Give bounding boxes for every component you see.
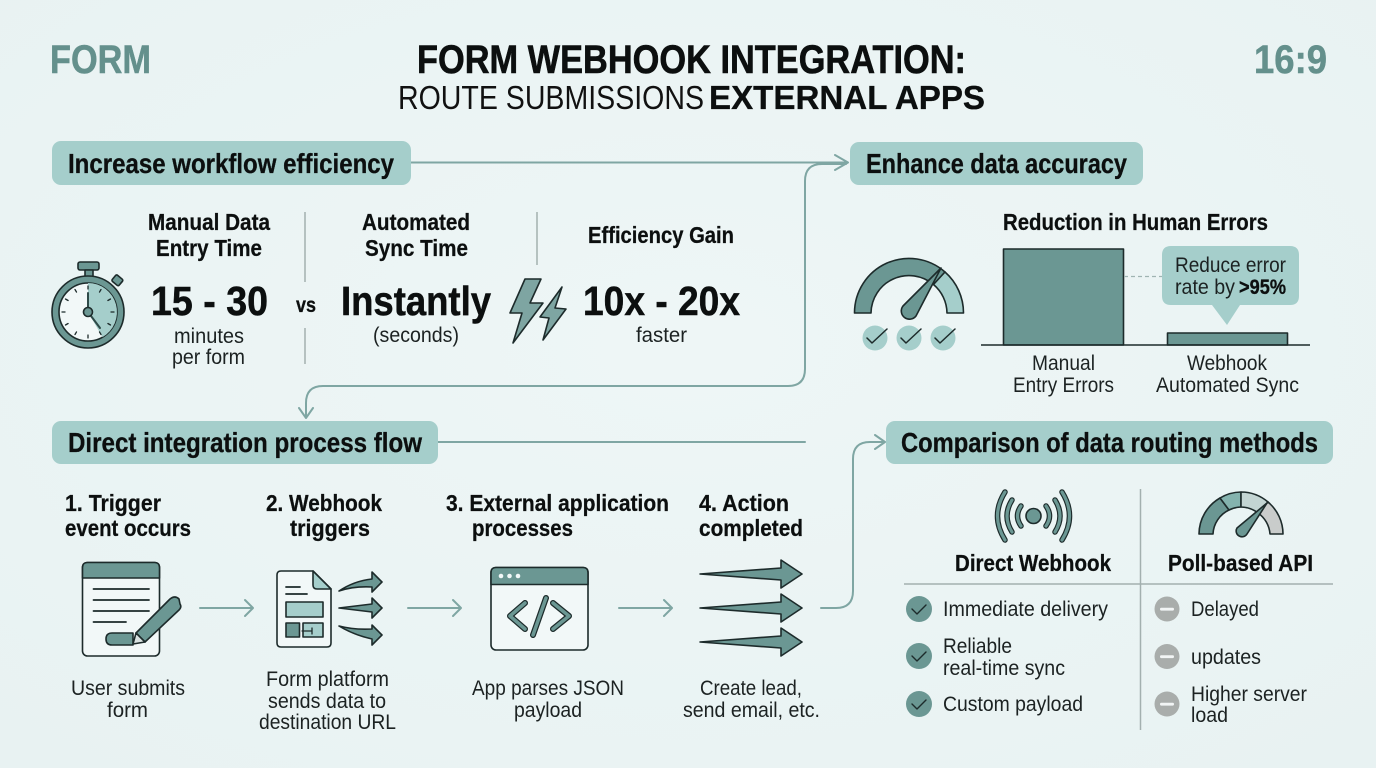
step 3: external application processes: 3. External application xyxy=(446,490,669,516)
title: EXTERNAL APPS xyxy=(709,79,985,116)
stat: manual data entry time: Manual Data xyxy=(148,209,271,235)
stat: efficiency gain: Efficiency Gain xyxy=(588,222,734,248)
title: ROUTE SUBMISSIONS xyxy=(398,79,704,116)
divider label: vs: vs xyxy=(296,294,316,317)
step 3: external application processes: processes xyxy=(472,515,573,541)
row: custom payload: Custom payload xyxy=(943,693,1083,716)
icon: three action arrows xyxy=(700,560,802,656)
heading pill: Comparison of data routing methods xyxy=(886,421,1333,464)
column: direct webhook xyxy=(906,492,1112,717)
icon: broadcast signal xyxy=(998,492,1070,540)
row: updates: updates xyxy=(1191,646,1261,669)
row: delayed xyxy=(1154,596,1259,622)
icon: form and pencil xyxy=(82,562,181,656)
icon: stopwatch xyxy=(52,262,124,348)
heading pill: Increase workflow efficiency: Increase workflow efficiency xyxy=(68,148,395,179)
heading pill: Enhance data accuracy xyxy=(850,142,1143,185)
step 2: webhook triggers: sends data to xyxy=(268,690,386,713)
heading pill: Comparison of data routing methods: Comparison of data routing methods xyxy=(901,427,1318,458)
chart: reduction in human errors: Manual xyxy=(1032,352,1095,375)
stat: automated sync time: Sync Time xyxy=(365,235,468,261)
step 3: external application processes: App parses JSON xyxy=(472,677,624,700)
row: reliable real-time sync xyxy=(906,635,1065,680)
step 2: webhook triggers xyxy=(259,490,396,734)
title: FORM WEBHOOK INTEGRATION: xyxy=(417,38,966,82)
stat: automated sync time: (seconds) xyxy=(373,324,459,347)
column: direct webhook: Direct Webhook xyxy=(955,550,1112,576)
arrow: efficiency to accuracy xyxy=(411,155,848,170)
step 1: trigger event occurs: User submits xyxy=(71,677,185,700)
stat: efficiency gain: faster xyxy=(636,324,687,347)
step 1: trigger event occurs: event occurs xyxy=(65,515,191,541)
stat: manual data entry time: Entry Time xyxy=(156,235,262,261)
row: reliable real-time sync: Reliable xyxy=(943,635,1012,658)
stat: manual data entry time: minutes xyxy=(174,325,244,348)
callout: reduce error rate: Reduce error xyxy=(1175,254,1286,277)
arrow: step 3 to 4 xyxy=(619,600,672,616)
stat: manual data entry time xyxy=(148,209,271,369)
callout: reduce error rate: >95% xyxy=(1239,276,1286,299)
chart: reduction in human errors: Entry Errors xyxy=(1013,374,1114,397)
connector: process flow header line xyxy=(438,441,805,443)
stat: automated sync time xyxy=(341,209,491,347)
row: delayed: Delayed xyxy=(1191,598,1259,621)
step 2: webhook triggers: triggers xyxy=(290,515,370,541)
panel: increase workflow efficiency xyxy=(52,141,740,369)
step 4: action completed: 4. Action xyxy=(699,490,789,516)
stat: efficiency gain: 10x - 20x xyxy=(583,278,740,324)
chart: reduction in human errors xyxy=(981,209,1310,397)
row: higher server load xyxy=(1154,683,1307,727)
step 4: action completed: Create lead, xyxy=(700,677,802,700)
stat: automated sync time: Automated xyxy=(362,209,470,235)
step 1: trigger event occurs: 1. Trigger xyxy=(65,490,161,516)
row: updates xyxy=(1154,644,1261,669)
step 4: action completed: send email, etc. xyxy=(683,699,820,722)
row: custom payload xyxy=(906,691,1083,717)
heading pill: Direct integration process flow: Direct integration process flow xyxy=(68,427,423,458)
icon: accuracy gauge with checks xyxy=(854,258,964,350)
panel: comparison of data routing methods xyxy=(886,421,1333,730)
icon: poll gauge xyxy=(1199,492,1283,537)
heading pill: Enhance data accuracy: Enhance data accuracy xyxy=(866,148,1128,179)
row: higher server load: Higher server xyxy=(1191,683,1307,706)
logo label: FORM: FORM xyxy=(50,38,151,82)
step 2: webhook triggers: destination URL xyxy=(259,711,396,734)
icon: lightning bolts xyxy=(510,279,566,343)
arrow: step 2 to 3 xyxy=(408,600,461,616)
step 3: external application processes xyxy=(446,490,669,722)
panel: direct integration process flow xyxy=(52,421,820,734)
table dividers xyxy=(904,489,1333,730)
column: poll-based api xyxy=(1154,492,1313,727)
heading pill: Direct integration process flow xyxy=(52,421,438,464)
ratio label: 16:9: 16:9 xyxy=(1254,38,1327,82)
stat: manual data entry time: per form xyxy=(172,346,245,369)
row: immediate delivery xyxy=(906,596,1108,622)
step 4: action completed: completed xyxy=(699,515,803,541)
row: higher server load: load xyxy=(1191,704,1228,727)
stat: manual data entry time: 15 - 30 xyxy=(151,278,268,324)
step 3: external application processes: payload xyxy=(514,699,582,722)
callout: reduce error rate: rate by xyxy=(1175,276,1235,299)
row: immediate delivery: Immediate delivery xyxy=(943,598,1108,621)
callout: reduce error rate xyxy=(1162,246,1299,325)
heading pill: Increase workflow efficiency xyxy=(52,141,411,185)
icon: code window xyxy=(491,568,588,650)
row: reliable real-time sync: real-time sync xyxy=(943,657,1065,680)
arrow: accuracy to process flow xyxy=(299,164,846,418)
step 1: trigger event occurs: form xyxy=(107,699,148,722)
chart: reduction in human errors: Reduction in Human Errors xyxy=(1003,209,1268,235)
step 2: webhook triggers: 2. Webhook xyxy=(266,490,383,516)
step 1: trigger event occurs xyxy=(65,490,191,722)
stat: efficiency gain xyxy=(537,212,740,347)
title xyxy=(398,38,985,116)
chart: reduction in human errors: Webhook xyxy=(1187,352,1267,375)
column: poll-based api: Poll-based API xyxy=(1168,550,1313,576)
step 2: webhook triggers: Form platform xyxy=(266,668,389,691)
stat: automated sync time: Instantly xyxy=(341,278,491,324)
arrow: step 1 to 2 xyxy=(200,600,253,616)
panel: enhance data accuracy xyxy=(850,142,1310,397)
arrow: process flow to comparison xyxy=(821,435,885,608)
step 4: action completed xyxy=(683,490,820,722)
icon: document with outgoing arrows xyxy=(277,571,382,647)
chart: reduction in human errors: Automated Sync xyxy=(1156,374,1299,397)
